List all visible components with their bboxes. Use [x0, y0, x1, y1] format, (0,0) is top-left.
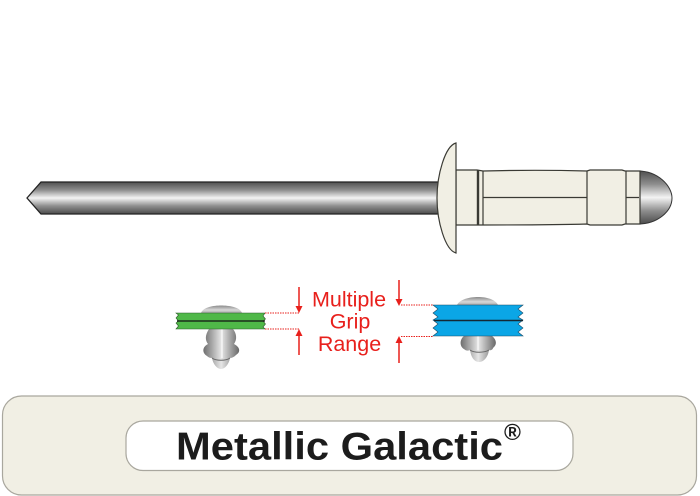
mandrel dome tip	[638, 171, 672, 224]
right installed rivet, blue plates	[433, 297, 523, 362]
title: Metallic Galactic	[176, 426, 503, 468]
large rivet	[27, 143, 672, 253]
body section lines	[478, 170, 639, 225]
blue sheet	[433, 305, 523, 336]
top dome	[457, 297, 498, 305]
green sheet	[176, 313, 266, 329]
rivet flange head	[437, 143, 456, 253]
label: multiple grip range: Multiple	[312, 288, 386, 312]
mandrel shaft	[27, 182, 440, 214]
label: multiple grip range: Grip	[330, 310, 370, 334]
dotted guide lines	[265, 305, 433, 336]
name plate white inner box	[126, 421, 573, 470]
registered mark: ®	[504, 419, 521, 445]
left installed rivet, green plates	[176, 306, 266, 369]
name plate panel	[2, 396, 696, 495]
rivet body	[456, 170, 640, 225]
top dome	[201, 306, 242, 313]
lower bulb	[203, 329, 239, 369]
red arrows	[296, 280, 402, 363]
lower bulb	[461, 336, 496, 362]
label: multiple grip range: Range	[318, 332, 381, 356]
label: multiple grip range	[312, 288, 386, 356]
grip range markers	[265, 280, 433, 363]
